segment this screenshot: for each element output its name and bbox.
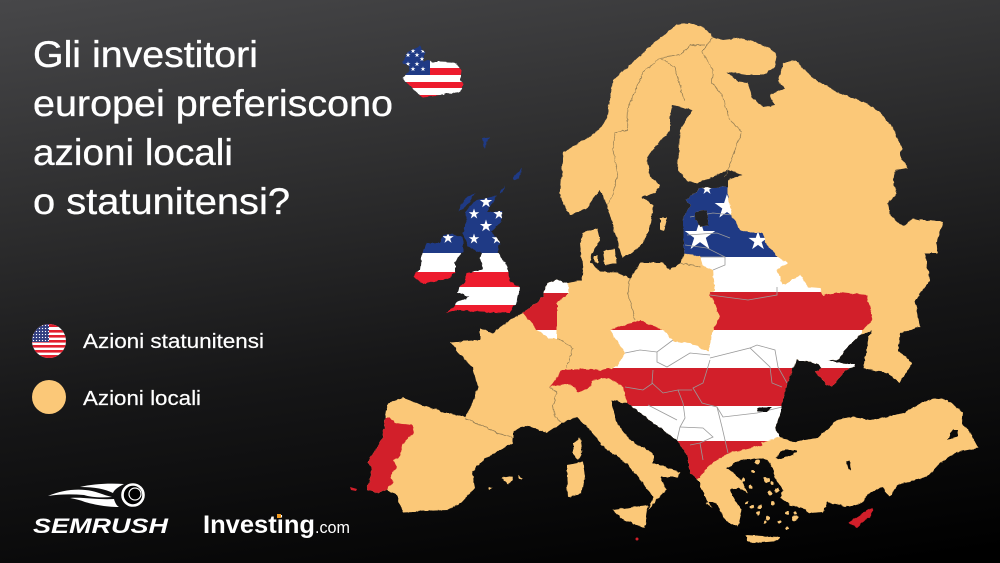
Iceland stars — [406, 48, 425, 71]
icon: fireball — [48, 484, 144, 507]
Cyprus — [848, 507, 873, 527]
icon: orange accent — [277, 514, 281, 518]
Malta — [636, 538, 638, 540]
title: Gli investitori — [33, 34, 258, 75]
flag region: US stocks, eastern Europe — [550, 186, 872, 479]
legend: local stocks — [32, 380, 201, 414]
legend: US stocks — [32, 324, 264, 358]
Ireland flag — [414, 234, 464, 284]
stars — [685, 183, 768, 249]
Great Britain flag — [446, 195, 520, 314]
title: europei preferiscono — [33, 83, 393, 124]
legend: local stocks: Azioni locali — [83, 388, 201, 410]
islands with local stocks — [488, 218, 798, 543]
country borders in local region — [465, 37, 742, 438]
logo: Semrush: SEMRUSH — [33, 515, 169, 538]
logo: Semrush — [33, 484, 169, 538]
Scottish and Faroe islands — [458, 137, 522, 212]
map of Europe — [350, 23, 978, 543]
Iceland flag — [402, 46, 464, 98]
title: o statunitensi? — [33, 181, 290, 222]
logo: Investing.com: Investing — [203, 511, 315, 539]
Portugal — [367, 418, 414, 493]
title — [33, 34, 393, 222]
logo: Investing.com: .com — [315, 518, 350, 537]
legend: US stocks: Azioni statunitensi — [83, 331, 264, 353]
local stocks landmass — [367, 23, 978, 527]
Madeira — [350, 487, 357, 491]
icon: US flag circle — [32, 324, 66, 358]
internal borders — [625, 213, 787, 460]
icon: peach circle — [32, 380, 66, 414]
Britain stars — [468, 198, 502, 244]
Netherlands and Belgium flag — [522, 280, 570, 339]
title: azioni locali — [33, 132, 233, 173]
